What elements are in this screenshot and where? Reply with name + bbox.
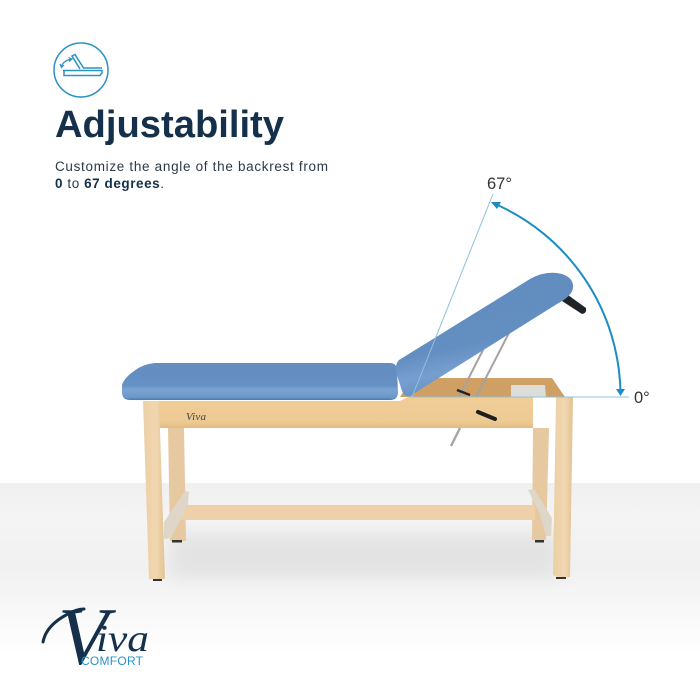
feet bbox=[153, 577, 566, 581]
corner brackets bbox=[164, 489, 552, 539]
description text: Customize the angle of the backrest from bbox=[55, 159, 328, 174]
description text bbox=[55, 159, 328, 191]
examination table bbox=[122, 273, 586, 581]
angle arc with arrows bbox=[491, 202, 625, 396]
angle guide lines bbox=[408, 194, 629, 397]
title: Adjustability bbox=[55, 104, 284, 146]
icon: adjustable table in circle bbox=[54, 43, 108, 97]
stretcher rail bbox=[178, 505, 535, 520]
backrest cushion bbox=[396, 273, 573, 396]
rear legs bbox=[168, 428, 549, 542]
floor background bbox=[0, 483, 700, 655]
brand logo: V bbox=[58, 591, 116, 682]
side handle bbox=[478, 412, 495, 419]
apron bbox=[159, 397, 533, 428]
front left leg bbox=[143, 401, 165, 579]
brand logo: COMFORT bbox=[81, 654, 144, 668]
label: 67 degrees: 67° bbox=[487, 175, 512, 193]
apron logo: Viva bbox=[186, 411, 206, 423]
description text: 0 to 67 degrees. bbox=[55, 176, 164, 191]
front right leg bbox=[553, 397, 573, 578]
label: 0 degrees: 0° bbox=[634, 389, 650, 407]
rod below apron bbox=[451, 428, 460, 446]
mounting plate bbox=[511, 385, 546, 397]
brand logo: iva bbox=[96, 618, 149, 660]
brand logo bbox=[43, 591, 149, 682]
seat cushion bbox=[122, 363, 398, 400]
headrest handle bbox=[562, 295, 586, 314]
support rods bbox=[459, 333, 509, 397]
tray handle bbox=[457, 390, 470, 395]
tray interior bbox=[400, 378, 565, 397]
